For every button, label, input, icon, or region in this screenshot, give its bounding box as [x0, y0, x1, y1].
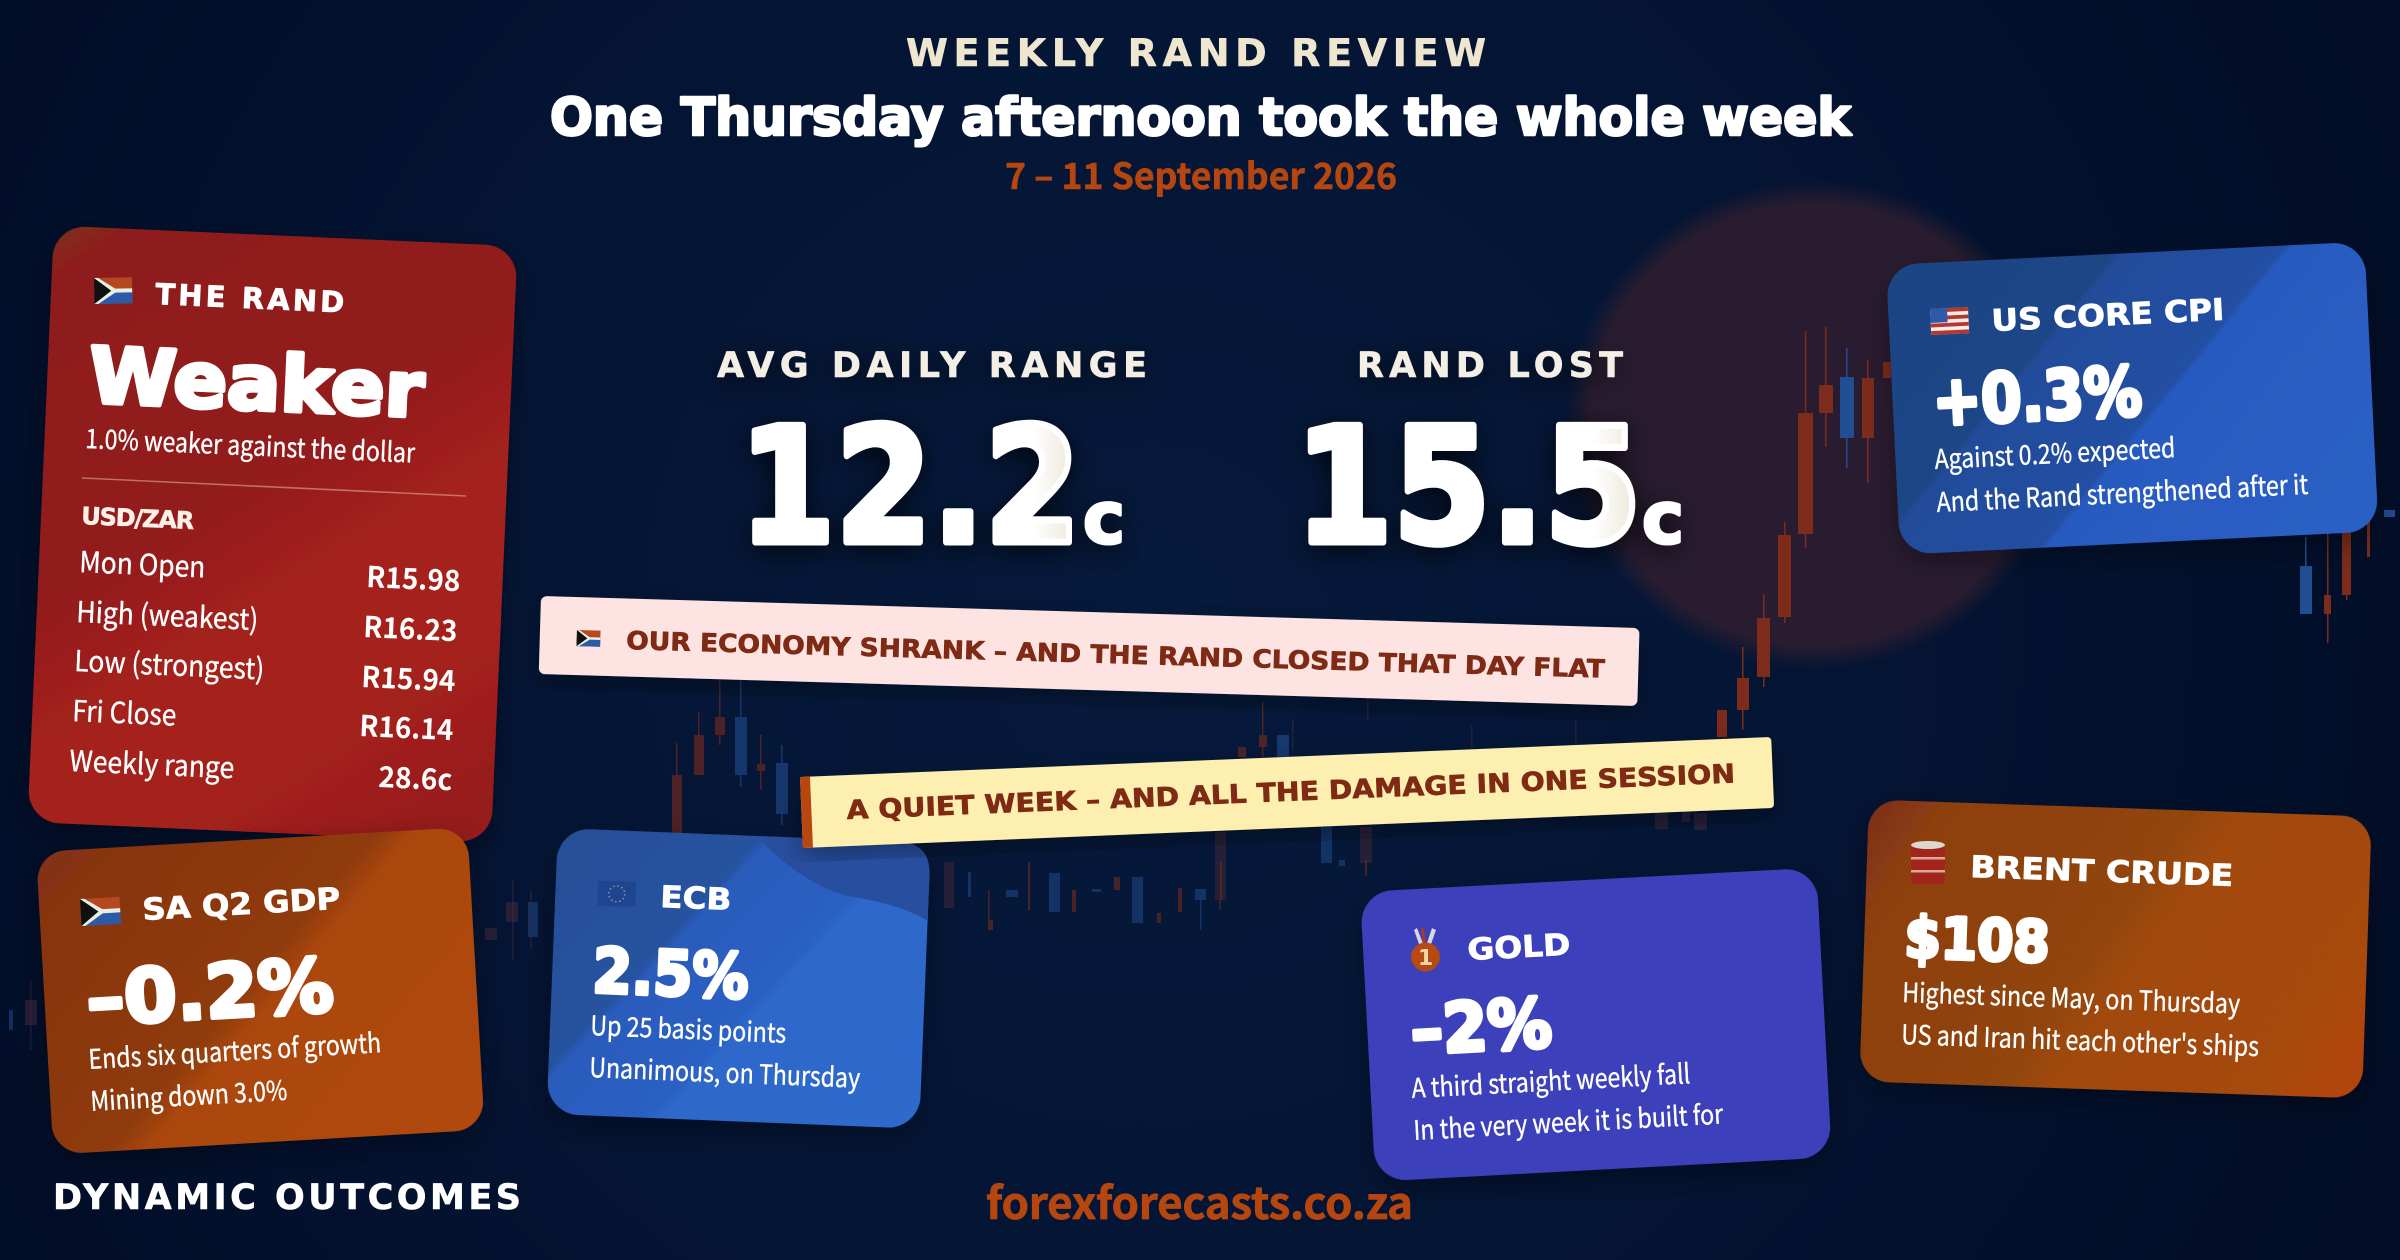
card value: 2.5% — [591, 934, 750, 1013]
stat label: AVG DAILY RANGE — [717, 346, 1147, 386]
card heading: SA Q2 GDP — [141, 882, 341, 928]
panel: ECB — [547, 828, 931, 1129]
card heading: GOLD — [1467, 928, 1571, 968]
card text: Against 0.2% expected — [1933, 426, 2176, 477]
card value: –0.2% — [84, 943, 336, 1043]
panel: Brent crude — [1859, 800, 2372, 1098]
card value: +0.3% — [1931, 353, 2144, 442]
card text: Ends six quarters of growth — [87, 1021, 382, 1077]
table rows: Weekly range — [69, 738, 235, 787]
table rows: Mon Open — [79, 539, 206, 587]
table rows — [69, 539, 461, 799]
stat label: RAND LOST — [1357, 346, 1623, 386]
card text: Mining down 3.0% — [89, 1069, 288, 1119]
panel: gold — [1360, 868, 1832, 1182]
callout text: A QUIET WEEK – AND ALL THE DAMAGE IN ONE SESSION — [846, 759, 1736, 826]
table rows: High (weakest) — [76, 589, 259, 639]
stat unit: c — [1083, 476, 1125, 560]
card text: Unanimous, on Thursday — [589, 1046, 861, 1096]
icon: oil barrel — [1911, 841, 1945, 884]
card text: And the Rand strengthened after it — [1935, 463, 2309, 520]
table rows: R16.23 — [363, 604, 458, 650]
panel: the Rand — [27, 226, 518, 843]
card subtitle: 1.0% weaker against the dollar — [85, 417, 416, 471]
table rows: Fri Close — [72, 688, 177, 735]
callout: economy shrank — [539, 596, 1640, 706]
callout text: OUR ECONOMY SHRANK – AND THE RAND CLOSED THAT DAY FLAT — [626, 626, 1605, 684]
card text: US and Iran hit each other's ships — [1901, 1013, 2260, 1064]
stat: average daily range — [717, 346, 1147, 580]
table rows: Low (strongest) — [74, 638, 265, 688]
icon: South African flag — [94, 277, 132, 304]
card heading: BRENT CRUDE — [1970, 850, 2234, 894]
table heading: USD/ZAR — [81, 502, 195, 535]
card value: $108 — [1904, 905, 2051, 976]
card value: Weaker — [87, 332, 426, 436]
card value: –2% — [1409, 985, 1554, 1071]
icon: EU flag — [598, 881, 636, 907]
header block — [550, 31, 1852, 200]
stat value: 15.5 — [1295, 393, 1642, 580]
website: forexforecasts.co.za — [986, 1168, 1413, 1232]
card text: Highest since May, on Thursday — [1902, 971, 2241, 1021]
stat unit: c — [1642, 476, 1684, 560]
card heading: US CORE CPI — [1991, 293, 2225, 339]
panel: US core CPI — [1886, 242, 2379, 555]
card text: Up 25 basis points — [590, 1004, 787, 1051]
table rows: 28.6c — [378, 754, 453, 799]
card text: In the very week it is built for — [1412, 1093, 1724, 1148]
table rows: R16.14 — [359, 703, 454, 749]
kicker: WEEKLY RAND REVIEW — [906, 31, 1486, 75]
table rows: R15.98 — [366, 554, 461, 600]
background candlestick chart — [9, 327, 2395, 1050]
icon: South African flag — [577, 630, 601, 647]
table rows: R15.94 — [361, 654, 456, 700]
card heading: ECB — [660, 880, 732, 918]
darker wave at the top right of the card — [760, 836, 931, 921]
icon: medal: 1 — [1418, 946, 1433, 971]
icon: medal — [1411, 928, 1440, 972]
icon: South African flag — [80, 897, 121, 926]
callout: quiet week — [800, 737, 1774, 848]
stat: rand lost — [1295, 346, 1684, 580]
card text: A third straight weekly fall — [1410, 1052, 1691, 1106]
brand name: DYNAMIC OUTCOMES — [53, 1178, 521, 1218]
date range: 7 – 11 September 2026 — [1005, 148, 1397, 200]
panel: SA Q2 GDP — [36, 827, 485, 1154]
card heading: THE RAND — [155, 277, 345, 319]
callout accent bar — [800, 777, 813, 848]
dark red sun disc — [1565, 180, 2065, 670]
title: One Thursday afternoon took the whole week — [550, 88, 1852, 148]
icon: US flag — [1930, 307, 1969, 335]
stat value: 12.2 — [739, 393, 1081, 580]
